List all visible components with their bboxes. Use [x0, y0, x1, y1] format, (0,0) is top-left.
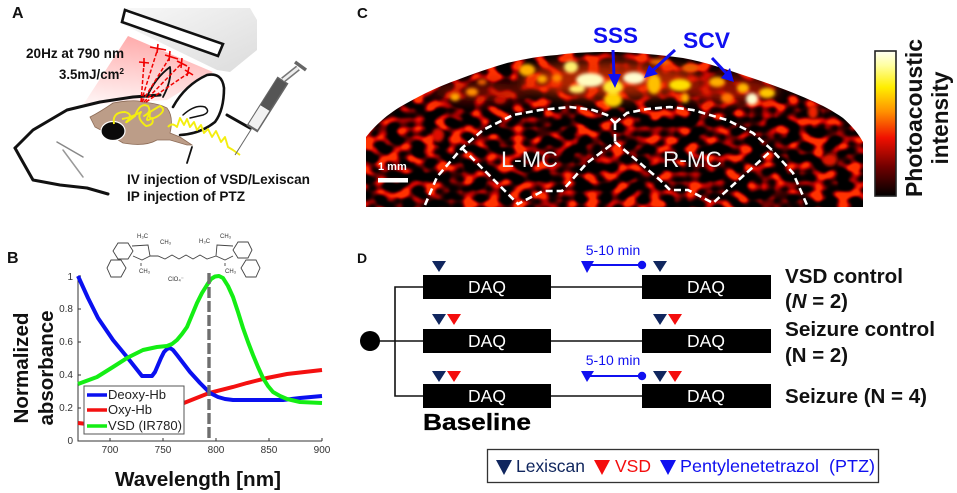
IR780 molecule structure: CH₃	[225, 269, 237, 275]
SSS label and arrow	[593, 23, 638, 88]
Lexiscan markers	[432, 261, 667, 382]
group labels	[785, 265, 935, 408]
DAQ blocks: DAQ	[687, 386, 725, 406]
injection text	[127, 172, 310, 204]
y axis title	[10, 310, 58, 426]
panel D: experimental timeline	[357, 242, 935, 482]
laser parameters text: 2	[119, 66, 124, 76]
color scale title: intensity	[927, 71, 953, 164]
PTZ interval, bottom: 5-10 min	[586, 352, 640, 368]
panel C: photoacoustic image	[357, 5, 953, 215]
laser parameters text: 3.5mJ/cm	[59, 67, 121, 82]
chart legend: VSD (IR780)	[108, 418, 182, 433]
IR780 molecule structure	[107, 234, 260, 283]
axes and ticks: 700	[102, 445, 119, 456]
DAQ blocks: DAQ	[468, 331, 506, 351]
PTZ interval, top	[581, 242, 646, 273]
DAQ blocks: DAQ	[687, 331, 725, 351]
y axis title: absorbance	[35, 310, 58, 426]
brain	[90, 101, 192, 145]
panel A: experimental setup	[12, 5, 310, 204]
axes and ticks: 0	[67, 436, 73, 447]
timeline connector lines	[370, 287, 642, 396]
start node	[360, 331, 380, 351]
drug legend: Pentylenetetrazol (PTZ)	[680, 456, 875, 476]
790 nm dashed marker	[207, 273, 211, 440]
drug legend: Lexiscan	[516, 456, 585, 476]
IR780 molecule structure: CH₃	[160, 240, 172, 246]
axes and ticks: 850	[261, 445, 278, 456]
panel label B: B	[7, 250, 19, 267]
IR780 molecule structure: CH₃	[220, 234, 232, 240]
red light paths	[139, 44, 193, 102]
x axis title: Wavelength [nm]	[115, 468, 281, 491]
panel label D: D	[357, 250, 367, 266]
group labels: Seizure (N = 4)	[785, 385, 927, 408]
syringe	[235, 62, 306, 155]
IR780 molecule structure: CH₃	[139, 269, 151, 275]
heat map image	[366, 52, 863, 207]
injection text: IP injection of PTZ	[127, 189, 245, 204]
axes and ticks: 0.6	[59, 337, 73, 348]
mouse outline	[15, 67, 250, 194]
group labels: Seizure control	[785, 318, 935, 341]
axes and ticks: 800	[208, 445, 225, 456]
mouse eye	[101, 122, 125, 140]
axes and ticks	[59, 272, 331, 456]
scale bar: 1 mm	[378, 161, 407, 173]
region labels	[501, 147, 722, 172]
laser parameters text	[26, 46, 124, 82]
y axis title: Normalized	[10, 312, 33, 424]
panel B: absorbance chart	[7, 234, 331, 491]
dashed motor cortex boundaries	[425, 107, 807, 205]
laser parameters text: 20Hz at 790 nm	[26, 46, 124, 61]
VSD markers	[447, 314, 682, 382]
DAQ blocks: DAQ	[687, 277, 725, 297]
drug legend: VSD	[615, 456, 651, 476]
PTZ interval, bottom	[581, 352, 646, 382]
baseline label: Baseline	[423, 409, 531, 435]
drug legend	[488, 450, 878, 482]
scale bar	[378, 161, 408, 182]
region labels: R-MC	[663, 147, 722, 172]
curve: Oxy-Hb	[78, 370, 322, 424]
color scale title	[901, 39, 953, 197]
curve: Deoxy-Hb	[78, 276, 322, 400]
panel label A: A	[12, 5, 24, 22]
color scale bar	[875, 51, 896, 196]
axes and ticks: 0.8	[59, 304, 73, 315]
axes and ticks: 0.2	[59, 403, 73, 414]
PTZ interval, top: 5-10 min	[586, 242, 640, 258]
group labels: (N = 2)	[785, 290, 848, 313]
chart legend	[84, 386, 184, 434]
SCV label and arrows	[644, 28, 734, 82]
SSS label and arrow: SSS	[593, 23, 638, 48]
SCV label and arrows: SCV	[683, 28, 730, 53]
panel label C: C	[357, 5, 368, 22]
DAQ blocks: DAQ	[468, 386, 506, 406]
axes and ticks: 0.4	[59, 370, 73, 381]
curve: VSD	[78, 276, 322, 403]
ultrasound transducer	[120, 8, 257, 72]
injection text: IV injection of VSD/Lexiscan	[127, 172, 310, 187]
chart legend: Deoxy-Hb	[108, 387, 166, 402]
color scale title: Photoacoustic	[901, 39, 927, 197]
axes and ticks: 900	[314, 445, 331, 456]
group labels: VSD control	[785, 265, 903, 288]
laser beam	[83, 36, 213, 105]
group labels: (N = 2)	[785, 344, 848, 367]
chart legend: Oxy-Hb	[108, 402, 152, 417]
DAQ blocks	[423, 275, 771, 408]
axes and ticks: 1	[67, 272, 73, 283]
region labels: L-MC	[501, 147, 558, 172]
yellow vessel tracer	[114, 105, 240, 155]
DAQ blocks: DAQ	[468, 277, 506, 297]
axes and ticks: 750	[155, 445, 172, 456]
IR780 molecule structure: H₃C	[199, 239, 211, 245]
IR780 molecule structure: H₃C	[137, 234, 149, 240]
IR780 molecule structure: ClO₄⁻	[168, 277, 184, 283]
bright vessel spots	[432, 59, 837, 166]
